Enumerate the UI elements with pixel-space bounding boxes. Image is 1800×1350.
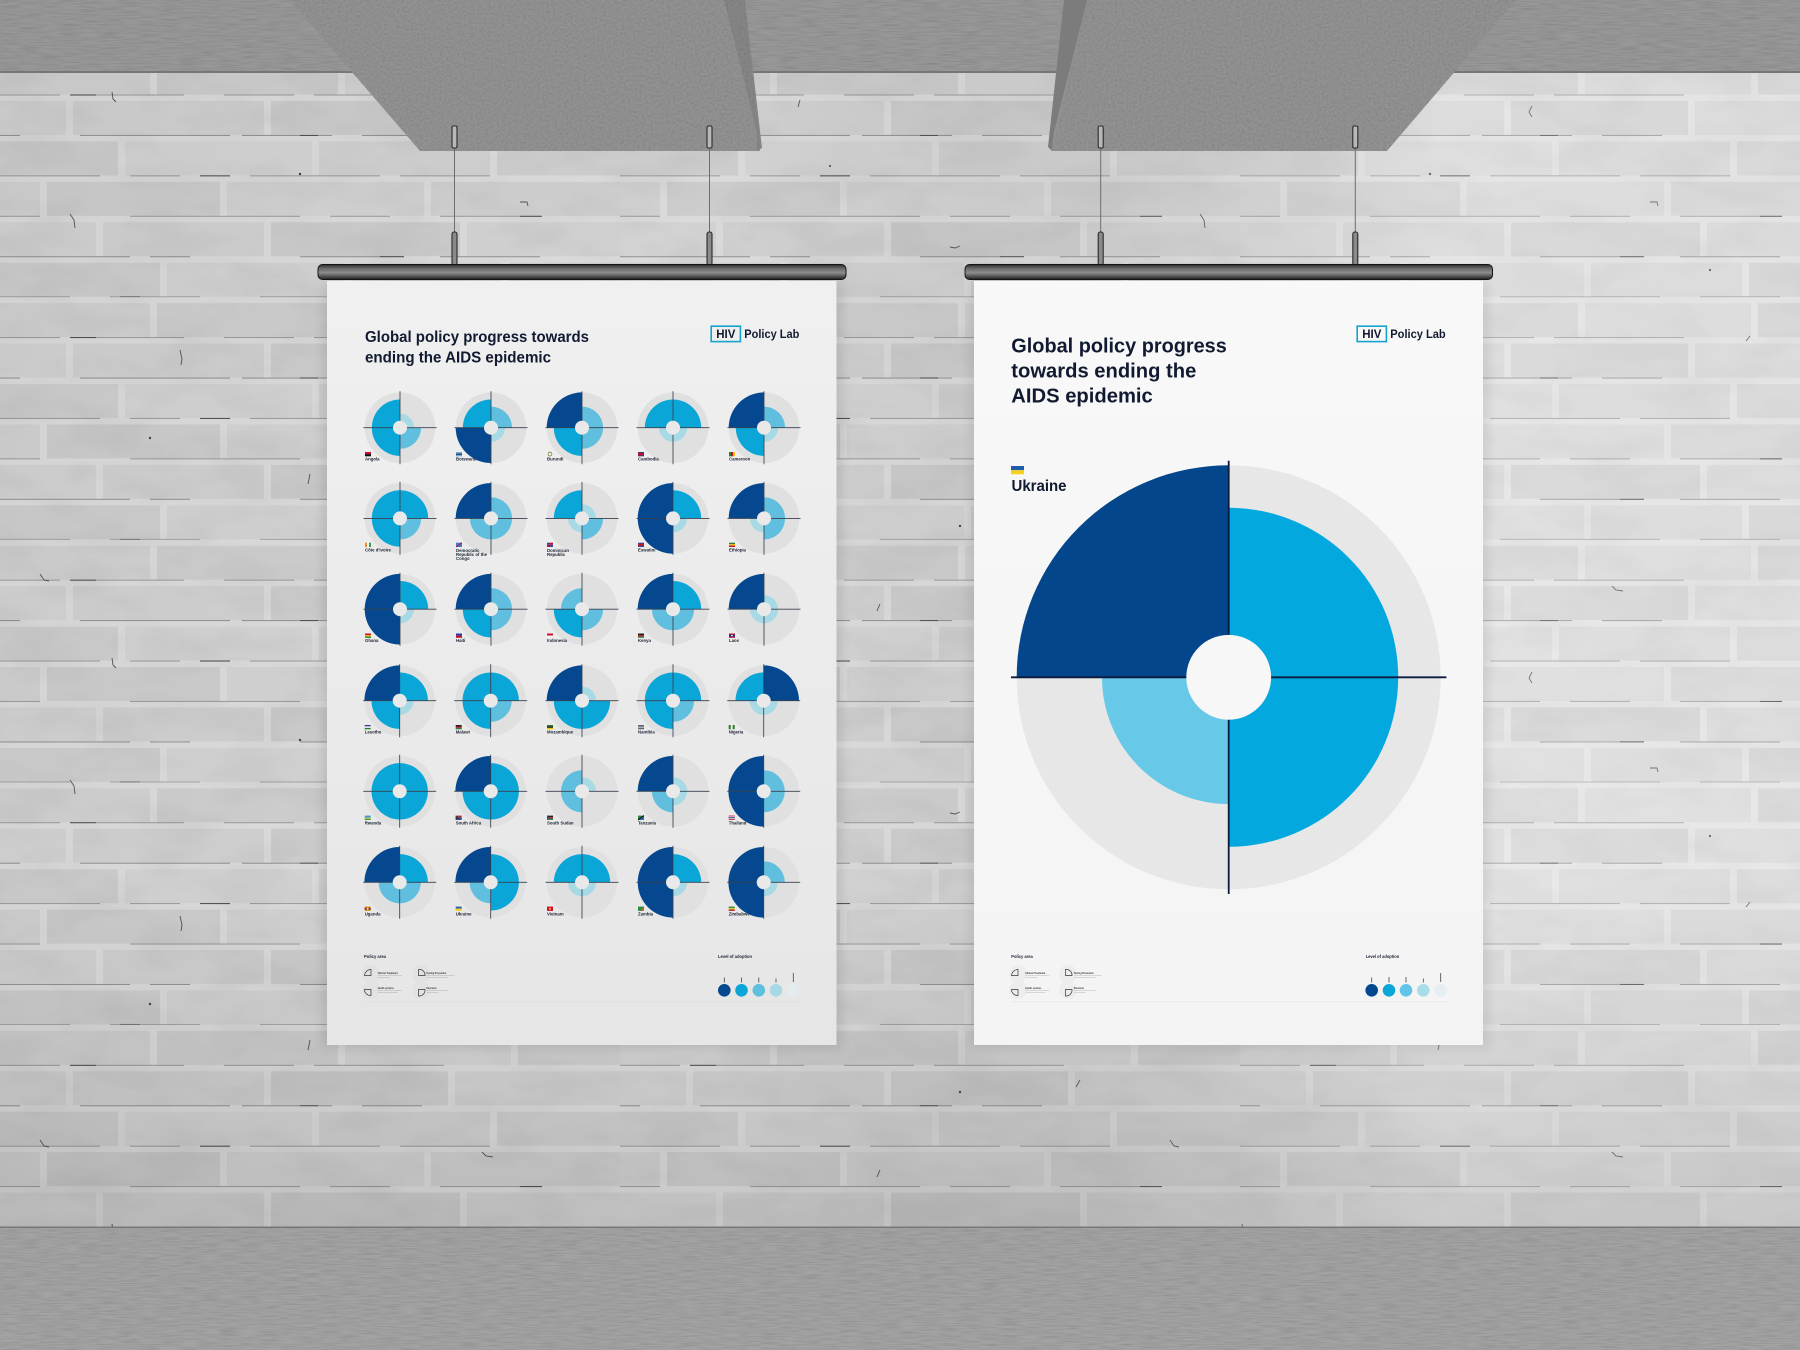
chart: Democratic Republic of the Congo: Democratic bbox=[456, 548, 480, 553]
chart: Laos: Laos bbox=[729, 638, 740, 643]
poster: country small multiples bbox=[318, 264, 846, 1048]
axis lines bbox=[1011, 461, 1446, 894]
chart: Dominican Republic: Dominican bbox=[547, 548, 569, 553]
chart: South Sudan: South Sudan bbox=[547, 820, 574, 825]
legend: policy area: Structural bbox=[1074, 986, 1084, 990]
chart: Burundi bbox=[546, 391, 618, 464]
chart: Mozambique: Mozambique bbox=[547, 730, 574, 735]
hanging bar left bbox=[318, 264, 846, 280]
chart: Dominican Republic: Republic bbox=[547, 552, 566, 557]
title: ending the AIDS epidemic bbox=[365, 350, 551, 366]
chart: Angola: Angola bbox=[365, 457, 380, 462]
chart: Malawi: Malawi bbox=[456, 730, 470, 735]
legend: level of adoption bbox=[718, 954, 800, 997]
poster: Ukraine bbox=[965, 264, 1492, 1048]
chart: Angola bbox=[364, 391, 436, 464]
quadrant: top-left, level 1 bbox=[1017, 465, 1229, 677]
legend: policy area bbox=[1009, 954, 1447, 1002]
grey base disc bbox=[1017, 465, 1441, 889]
hanging wires right poster bbox=[1098, 126, 1358, 265]
chart: Eswatini bbox=[636, 482, 710, 555]
legend: policy area: Testing Prevention bbox=[1074, 971, 1094, 975]
chart: Malawi bbox=[454, 664, 527, 737]
large radial chart: Ukraine bbox=[1011, 461, 1446, 894]
chart: Vietnam bbox=[546, 846, 618, 919]
chart: Ghana bbox=[364, 573, 436, 646]
chart: Eswatini: Eswatini bbox=[638, 547, 655, 552]
legend: policy area: Health systems bbox=[1025, 986, 1042, 990]
chart: Zimbabwe bbox=[727, 846, 800, 919]
title bbox=[365, 329, 589, 366]
logo: HIV Policy Lab: HIV bbox=[716, 329, 736, 341]
chart: Democratic Republic of the Congo bbox=[454, 482, 528, 561]
legend: level of adoption: Level of adoption bbox=[1366, 954, 1399, 959]
chart: Democratic Republic of the Congo: Congo bbox=[456, 556, 470, 561]
chart: Cambodia: Cambodia bbox=[638, 457, 659, 462]
chart: Dominican Republic bbox=[546, 482, 618, 557]
chart: Ghana: Ghana bbox=[365, 638, 379, 643]
chart: Botswana bbox=[454, 391, 528, 464]
title: AIDS epidemic bbox=[1011, 386, 1153, 408]
chart: Uganda: Uganda bbox=[365, 911, 381, 916]
logo: HIV Policy Lab bbox=[711, 326, 799, 342]
flag: Ukraine bbox=[1011, 466, 1024, 474]
title: Global policy progress bbox=[1011, 336, 1227, 358]
quadrant: bottom-left, level 3 bbox=[1102, 677, 1229, 804]
legend: policy area: Policy area bbox=[1011, 954, 1033, 959]
quadrant: bottom-right, level 2 bbox=[1229, 677, 1398, 847]
chart: Nigeria bbox=[727, 664, 800, 737]
title: Global policy progress towards bbox=[365, 329, 589, 346]
chart: Ukraine: Ukraine bbox=[456, 911, 472, 916]
chart: Kenya: Kenya bbox=[638, 638, 652, 643]
chart: Zimbabwe: Zimbabwe bbox=[729, 911, 750, 916]
chart: Democratic Republic of the Congo: Republic of the bbox=[456, 552, 488, 557]
chart: South Africa bbox=[454, 755, 527, 828]
legend: level of adoption bbox=[1365, 954, 1447, 997]
legend: policy area bbox=[362, 954, 800, 1002]
chart: Cote d'Ivoire bbox=[364, 482, 436, 555]
legend: policy area: Clinical Treatment bbox=[378, 971, 398, 975]
chart: Uganda bbox=[363, 846, 436, 919]
chart: Cambodia bbox=[636, 391, 710, 464]
acoustic ceiling panel right bbox=[1048, 0, 1520, 152]
title: towards ending the bbox=[1011, 361, 1196, 383]
chart: Laos bbox=[728, 573, 800, 646]
chart: Zambia: Zambia bbox=[638, 911, 654, 916]
legend: policy area: Testing Prevention bbox=[426, 971, 447, 975]
acoustic ceiling panel left bbox=[290, 0, 762, 152]
chart: Namibia bbox=[636, 664, 710, 737]
legend: policy area: Structural bbox=[426, 986, 437, 990]
chart: Ethiopia bbox=[728, 482, 800, 555]
logo: HIV Policy Lab: Policy Lab bbox=[744, 329, 799, 341]
chart: South Sudan bbox=[546, 755, 618, 828]
logo: HIV Policy Lab: HIV bbox=[1362, 329, 1382, 341]
chart: Haiti bbox=[454, 573, 528, 646]
floor bbox=[0, 1226, 1800, 1350]
logo: HIV Policy Lab bbox=[1357, 326, 1446, 342]
chart: South Africa: South Africa bbox=[456, 820, 482, 825]
chart: Namibia: Namibia bbox=[638, 730, 655, 735]
chart: Thailand: Thailand bbox=[729, 820, 747, 825]
chart: Rwanda bbox=[363, 755, 436, 828]
center hole bbox=[1186, 635, 1271, 720]
chart: Thailand bbox=[727, 755, 800, 828]
chart: Haiti: Haiti bbox=[456, 638, 465, 643]
chart: Zambia bbox=[636, 846, 710, 919]
chart: Tanzania: Tanzania bbox=[638, 820, 657, 825]
chart: Cameroon: Cameroon bbox=[729, 457, 751, 462]
title bbox=[1011, 336, 1227, 408]
legend: policy area: Policy area bbox=[364, 954, 386, 959]
hanging bar right bbox=[965, 264, 1492, 280]
chart: Rwanda: Rwanda bbox=[365, 820, 382, 825]
legend: policy area: Clinical Treatment bbox=[1025, 971, 1045, 975]
chart: Indonesia bbox=[546, 573, 618, 646]
chart: Cameroon bbox=[728, 391, 800, 464]
chart: Nigeria: Nigeria bbox=[729, 730, 744, 735]
logo: HIV Policy Lab: Policy Lab bbox=[1390, 329, 1446, 341]
chart: Lesotho bbox=[363, 664, 436, 737]
chart: Lesotho: Lesotho bbox=[365, 730, 382, 735]
ceiling bbox=[0, 0, 1800, 73]
chart: Mozambique bbox=[546, 664, 618, 737]
chart: Botswana: Botswana bbox=[456, 457, 477, 462]
chart: Ukraine bbox=[454, 846, 527, 919]
country label: Ukraine bbox=[1012, 478, 1067, 495]
legend: policy area: Health systems bbox=[378, 986, 394, 990]
quadrant: top-right, level 2 bbox=[1229, 508, 1398, 677]
chart: Indonesia: Indonesia bbox=[547, 638, 568, 643]
chart: Vietnam: Vietnam bbox=[547, 911, 564, 916]
chart: Kenya bbox=[636, 573, 710, 646]
hanging wires left poster bbox=[452, 126, 712, 265]
chart: Tanzania bbox=[636, 755, 710, 828]
legend: level of adoption: Level of adoption bbox=[718, 954, 752, 959]
chart: Ethiopia: Ethiopia bbox=[729, 547, 747, 552]
chart: Burundi: Burundi bbox=[547, 457, 563, 462]
chart: Cote d'Ivoire: Côte d'Ivoire bbox=[365, 547, 391, 552]
